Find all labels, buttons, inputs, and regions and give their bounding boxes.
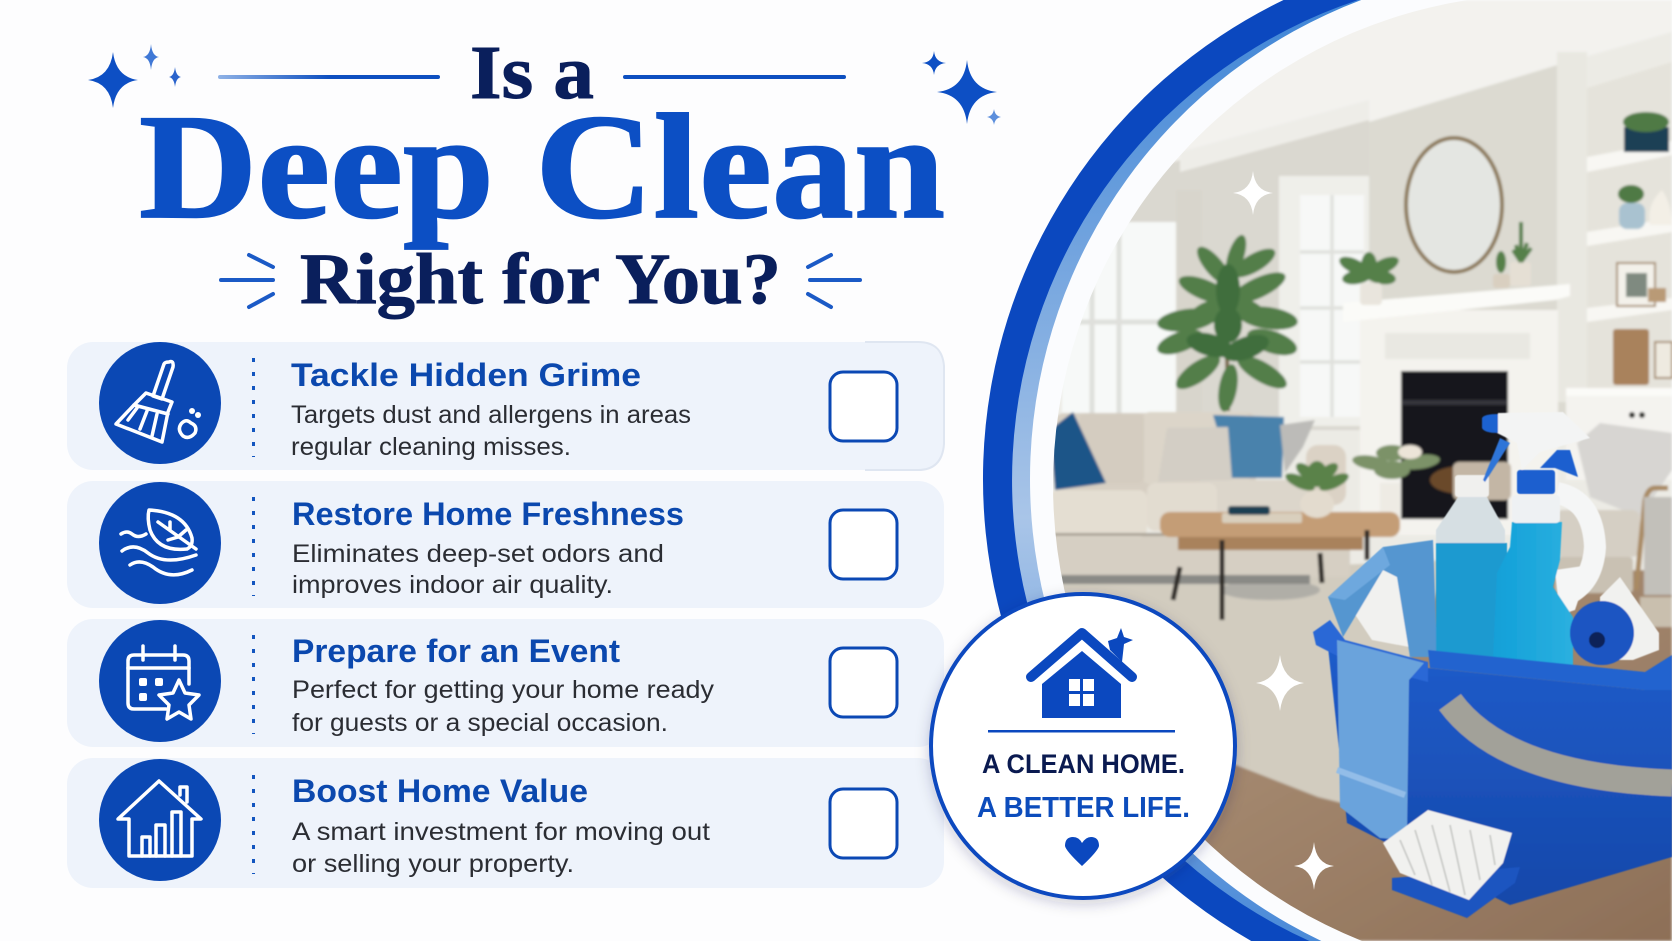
panel: boost home value — [67, 758, 944, 888]
icon: broom — [99, 342, 221, 464]
bucket handle — [1450, 702, 1672, 783]
decorative sparkles right — [922, 51, 1001, 125]
divider — [252, 497, 255, 596]
checkbox — [830, 372, 897, 441]
clear bottle — [1436, 475, 1507, 660]
description: A smart investment for moving out — [292, 818, 710, 846]
divider — [252, 775, 255, 874]
white band — [1030, 0, 1672, 941]
light blue band — [1012, 0, 1672, 941]
description: for guests or a special occasion. — [292, 709, 668, 737]
description: Targets dust and allergens in areas — [291, 401, 691, 429]
divider — [252, 358, 255, 457]
description — [292, 540, 664, 599]
table plant — [1283, 460, 1351, 518]
mirror — [1406, 138, 1502, 272]
scrub brush — [1383, 810, 1520, 918]
divider — [252, 635, 255, 734]
slogan line 2: A BETTER LIFE. — [977, 792, 1190, 824]
description — [291, 401, 691, 461]
curved photo frame — [983, 0, 1672, 941]
title line 2: Deep Clean — [139, 84, 945, 250]
decorative sparkles left — [88, 44, 181, 108]
room and cleaning supplies photo — [1040, 0, 1672, 941]
shelf decor — [1613, 112, 1672, 385]
heading: Tackle Hidden Grime — [291, 357, 641, 393]
description: or selling your property. — [292, 850, 574, 878]
badge: a clean home — [931, 594, 1235, 898]
title line 3: Right for You? — [300, 239, 781, 319]
rays right — [808, 255, 860, 307]
icon: house with sparkle — [1031, 628, 1133, 718]
description: improves indoor air quality. — [292, 571, 613, 599]
icon: calendar with star — [99, 620, 221, 742]
rug — [1040, 560, 1450, 805]
towel — [1337, 640, 1424, 840]
fireplace — [1343, 284, 1570, 535]
checkbox — [830, 789, 897, 858]
left window — [1062, 221, 1178, 414]
mantel plants — [1337, 222, 1531, 305]
heading: Restore Home Freshness — [292, 496, 684, 532]
checkbox — [830, 510, 897, 579]
coffee table — [1160, 506, 1400, 620]
icon: leaf and air — [99, 482, 221, 604]
large floor plant — [1154, 233, 1300, 413]
cleaning supplies — [1313, 412, 1672, 918]
panel: restore home freshness — [67, 481, 944, 608]
checkbox — [830, 648, 897, 717]
sparkle: rug — [1256, 655, 1304, 711]
title line 1: Is a — [470, 31, 594, 115]
white jug — [1555, 493, 1595, 615]
rule right — [623, 75, 846, 79]
heading: Boost Home Value — [292, 773, 588, 809]
dark blue band — [983, 0, 1672, 941]
description: Eliminates deep-set odors and — [292, 540, 664, 568]
shelves — [1587, 141, 1672, 322]
sparkle: room upper — [1233, 171, 1273, 215]
description: Perfect for getting your home ready — [292, 676, 715, 704]
spray bottle — [1482, 412, 1590, 670]
living room scene — [1040, 0, 1672, 941]
description — [292, 818, 710, 878]
icon: heart — [1065, 837, 1099, 866]
floor — [1205, 568, 1672, 941]
bucket — [1313, 620, 1672, 905]
heading: Prepare for an Event — [292, 633, 620, 669]
mop cloth — [1328, 540, 1437, 657]
rays left — [221, 255, 273, 307]
armchair and cushion — [1555, 423, 1672, 627]
rule left — [218, 75, 440, 79]
cabinet — [1566, 388, 1672, 480]
rule — [988, 730, 1175, 732]
title — [88, 31, 1001, 319]
panel: tackle hidden grime — [67, 342, 944, 470]
description: regular cleaning misses. — [291, 433, 571, 461]
icon: house with growth bars — [99, 759, 221, 881]
hearth plant and vase — [1351, 445, 1511, 516]
panel: prepare for an event — [67, 619, 944, 747]
sofa — [1050, 412, 1350, 584]
round brush — [1570, 577, 1659, 665]
sparkle: floor — [1294, 842, 1334, 890]
slogan line 1: A CLEAN HOME. — [982, 749, 1185, 779]
photo sparkles — [1233, 171, 1334, 890]
description — [292, 676, 715, 737]
centre window — [1279, 176, 1369, 426]
